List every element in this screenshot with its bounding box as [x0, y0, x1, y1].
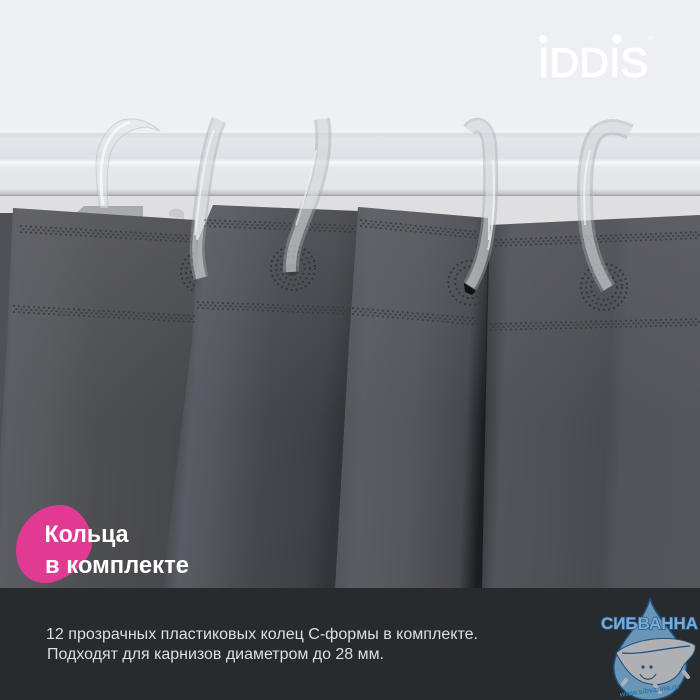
curtain panel 1: [0, 208, 200, 588]
curtain far-left strip: [0, 213, 14, 450]
description text: [46, 626, 478, 663]
description text: 12 прозрачных пластиковых колец С-формы в комплекте.: [46, 626, 478, 643]
curtain rod: [0, 133, 700, 196]
stitching rows: [13, 220, 700, 330]
water drop: [614, 598, 686, 700]
curtain panel 4: [478, 215, 700, 588]
watermark: sibvanna: [601, 598, 698, 700]
logo: iddis: ®: [648, 35, 654, 43]
heading: в комплекте: [45, 552, 189, 579]
grommet on panel 2: [271, 246, 315, 290]
description text: Подходят для карнизов диаметром до 28 мм.: [47, 646, 384, 663]
logo: iddis: IDDIS: [538, 40, 648, 86]
band under curtain rod: [0, 195, 700, 235]
grommet on panel 1: [181, 252, 221, 292]
grommet on panel 4: [581, 264, 627, 310]
website: www.sibvanna.ru: [619, 682, 680, 699]
wall background: [0, 0, 700, 240]
rod bracket: [74, 206, 184, 219]
ring 2: [195, 120, 219, 278]
brand name: СИБВАННА: [601, 615, 698, 633]
bathtub: [616, 638, 695, 692]
ring 3: [291, 119, 323, 272]
ring 1 behind curtain: [96, 119, 160, 208]
ring 4: [469, 125, 494, 286]
heading: [44, 521, 189, 579]
caption panel: [0, 588, 700, 700]
heading: Кольца: [44, 521, 129, 548]
ring 5: [584, 127, 630, 288]
curtain panel 2: [162, 205, 358, 588]
curtain panel 3: [335, 207, 488, 588]
pink blob: [16, 505, 92, 583]
grommet on panel 3: [448, 261, 484, 305]
